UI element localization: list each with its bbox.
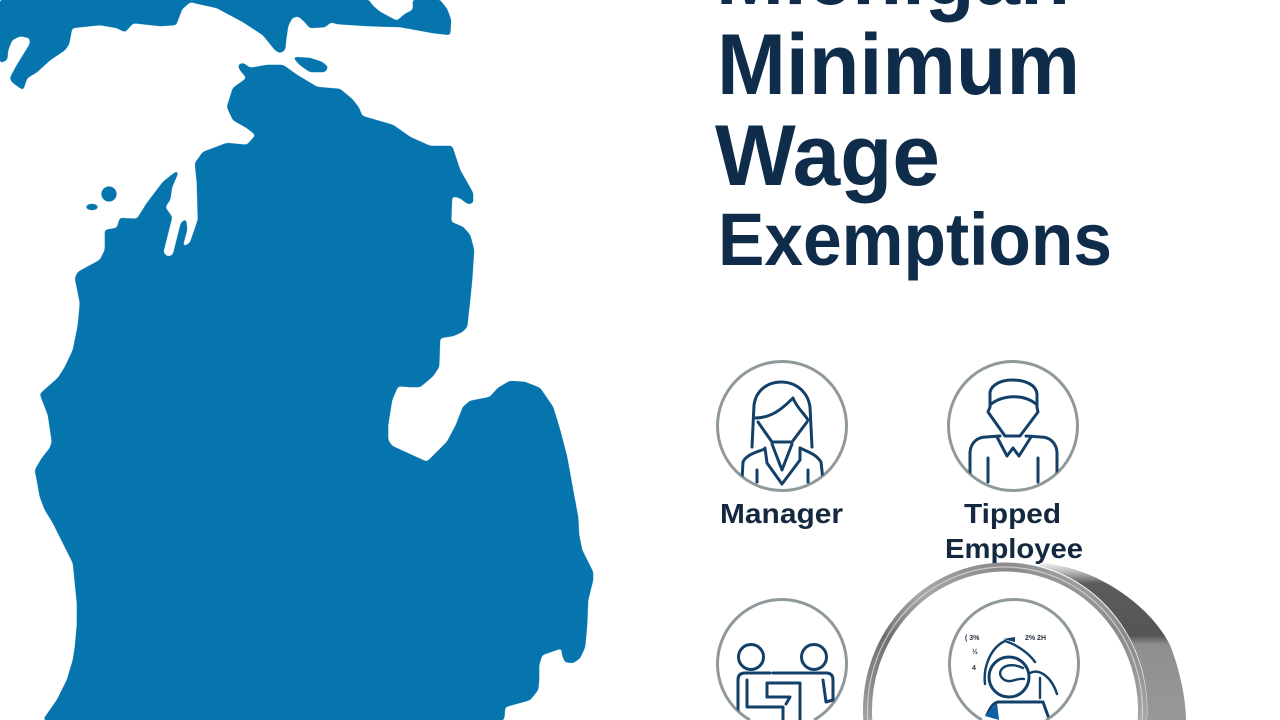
icon: tipped employee xyxy=(948,362,1078,490)
garbled annotation marks: 2% 2H xyxy=(1025,635,1046,642)
icon detail: blue shirt xyxy=(985,703,999,720)
rim highlight xyxy=(867,567,1142,720)
title: Wage xyxy=(715,108,940,204)
upper peninsula xyxy=(0,0,451,90)
label: manager: Manager xyxy=(720,498,843,529)
title: Exemptions xyxy=(718,198,1112,281)
island in the straits xyxy=(293,57,328,72)
icon: two people at a desk xyxy=(718,599,846,720)
label: tipped employee xyxy=(945,498,1083,564)
label: tipped employee: Tipped xyxy=(964,498,1061,529)
magnifying glass xyxy=(867,563,1186,720)
icon: employee under magnifier xyxy=(950,599,1078,720)
title: Minimum xyxy=(717,17,1080,113)
magnifier outer band xyxy=(1040,563,1186,720)
icon detail: cap xyxy=(1003,637,1015,642)
garbled annotation marks: ½ xyxy=(972,648,978,656)
label: tipped employee: Employee xyxy=(945,533,1083,564)
garbled annotation marks xyxy=(965,635,1046,672)
garbled annotation marks: ( 3% xyxy=(965,635,980,642)
lower peninsula xyxy=(35,63,593,720)
exemption: manager xyxy=(718,362,846,529)
icon: manager xyxy=(718,362,846,490)
map of Michigan xyxy=(0,0,593,720)
garbled annotation marks: 4 xyxy=(972,665,976,672)
exemption: tipped employee xyxy=(945,362,1083,564)
small islands xyxy=(86,186,116,210)
magnifier front rim xyxy=(867,567,1142,720)
title xyxy=(715,0,1112,281)
